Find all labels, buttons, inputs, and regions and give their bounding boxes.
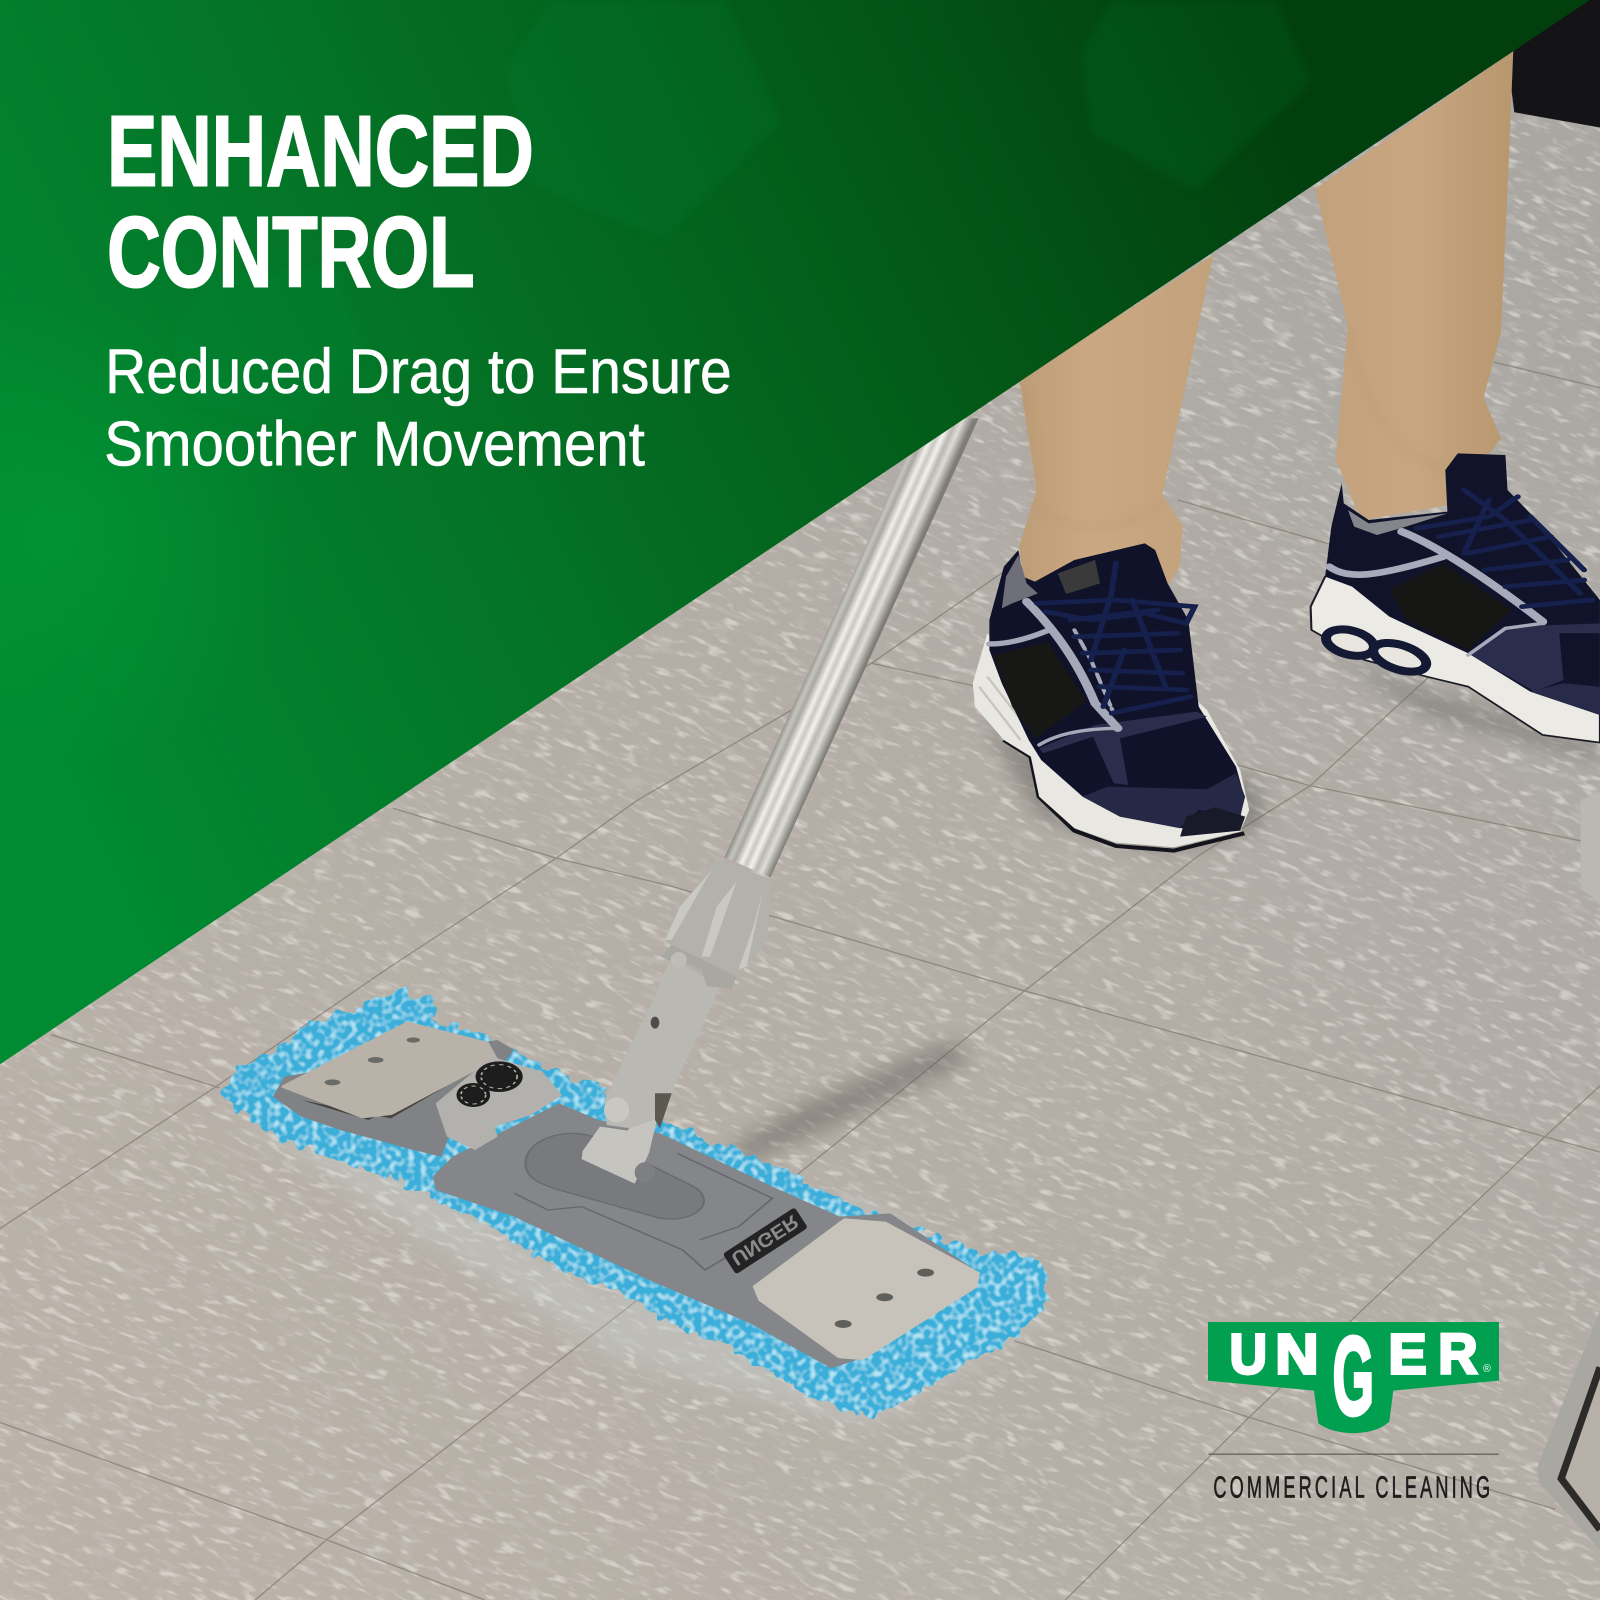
cart object at right edge (1581, 792, 1600, 904)
centre tray (433, 1103, 980, 1368)
logo wordmark: G (1333, 1315, 1374, 1439)
grey overlays (1329, 532, 1543, 655)
logo badge (1208, 1322, 1499, 1433)
subtitle (104, 337, 732, 479)
title (107, 96, 534, 309)
sole (1311, 560, 1600, 743)
left plate (284, 1023, 495, 1117)
logo: Unger Commercial Cleaning (1208, 1315, 1499, 1504)
shadows under shoes and handle (730, 653, 1600, 1163)
right plate (756, 1220, 977, 1358)
tray recess (525, 1133, 704, 1219)
sole ridges (979, 677, 1029, 740)
toe bumper (1180, 807, 1245, 837)
subtitle: Reduced Drag to Ensure (105, 337, 732, 407)
telescopic pole (724, 418, 979, 878)
trouser legs (1019, 51, 1513, 590)
clevis (582, 1097, 661, 1184)
laces (1416, 490, 1592, 607)
mop frame (273, 1023, 980, 1368)
collar ribs (665, 870, 763, 970)
sock lining (1348, 510, 1447, 535)
suede strip (1039, 712, 1207, 785)
side panel (994, 642, 1087, 738)
side panel (1389, 563, 1512, 650)
arm (605, 957, 720, 1128)
left leg (1019, 255, 1213, 590)
left wing of tray (273, 1040, 514, 1157)
toe cap (1083, 773, 1245, 828)
plate shadow gap (301, 1060, 492, 1120)
right leg (1315, 51, 1513, 520)
outsole edge (1004, 740, 1244, 851)
pivot cap (604, 1097, 629, 1123)
mop pad halo on floor (230, 1112, 1051, 1429)
laces (1037, 563, 1195, 713)
title: CONTROL (107, 197, 474, 309)
green diagonal panel (0, 0, 1590, 1064)
mop pad: blue microfiber (222, 990, 1050, 1418)
wall corner top right (1500, 0, 1600, 128)
sole (973, 633, 1249, 847)
fork shadow (655, 1093, 672, 1128)
bright glow (0, 0, 1590, 1064)
hole (651, 1017, 659, 1029)
cloth folds (1026, 327, 1449, 527)
bucket handle bottom right (1537, 1310, 1600, 1550)
hex base (662, 944, 737, 989)
grey overlays (989, 602, 1120, 745)
collar (665, 858, 772, 975)
heel air pods (1322, 625, 1432, 677)
registered mark: ® (1483, 1363, 1491, 1375)
upper (989, 543, 1244, 828)
left shoe (973, 543, 1249, 851)
logo wordmark: N (1275, 1324, 1319, 1387)
upper (1325, 453, 1600, 715)
UNGER mark on tray (723, 1207, 808, 1274)
UNGER mark on tray: UNGER (727, 1210, 802, 1270)
divider (1208, 1453, 1499, 1456)
latch (436, 1057, 562, 1150)
rivet (671, 952, 687, 968)
heel tab (1058, 560, 1100, 594)
right shoe (1311, 453, 1600, 743)
mop handle joint (582, 858, 772, 1184)
suede strip (1468, 623, 1600, 692)
logo wordmark: R (1438, 1324, 1478, 1387)
sock lining (1002, 555, 1038, 608)
logo wordmark (1230, 1315, 1478, 1439)
subtitle: Smoother Movement (104, 409, 645, 479)
toe piece (1530, 683, 1600, 715)
pivot pin (635, 1162, 655, 1183)
latch emblem (456, 1061, 523, 1107)
lens flare shapes (173, 0, 1311, 429)
title: ENHANCED (107, 96, 534, 208)
logo wordmark: U (1230, 1324, 1267, 1387)
logo wordmark: E (1388, 1324, 1427, 1387)
tray ridges (514, 1153, 772, 1270)
